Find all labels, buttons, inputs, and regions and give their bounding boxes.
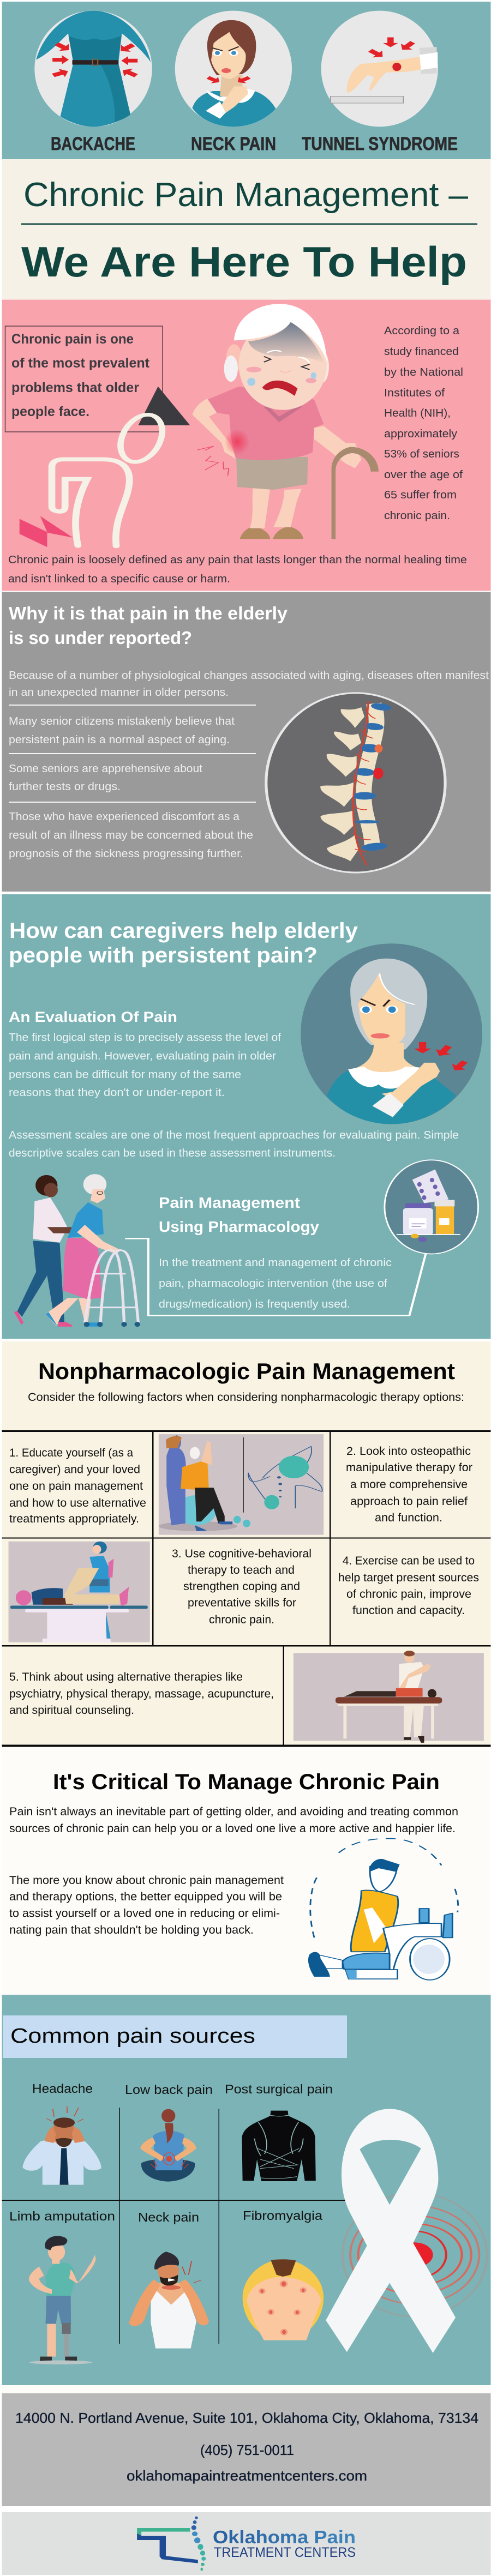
text: knowledge: The more you know about chronic pain management [9, 1874, 284, 1887]
text: NIH study: Institutes of [384, 387, 445, 399]
text: definition: and isn't linked to a specific cause or harm. [8, 573, 230, 585]
heading band: Common pain sources [10, 2025, 255, 2048]
labels: Fibromyalgia [243, 2208, 322, 2223]
text: evaluation: pain and anguish. However, evaluating pain in older [9, 1050, 276, 1062]
text: NIH study: chronic pain. [384, 509, 450, 522]
text: intro: sources of chronic pain can help you or a loved one live a more active and happier life. [9, 1822, 456, 1835]
icon: neck pain man [129, 2252, 209, 2349]
panel: contact details [2, 2393, 491, 2506]
text: tip 1: one on pain management [9, 1480, 143, 1492]
text: tip 5 [9, 1671, 274, 1717]
text: reasons list: persistent pain is a normal aspect of aging. [9, 733, 230, 746]
table grid [2, 1430, 491, 1747]
text: tip 2: manipulative therapy for [346, 1461, 472, 1474]
text: tip 3 [172, 1548, 312, 1626]
labels [9, 2081, 333, 2224]
text: pharmacology [159, 1256, 392, 1310]
heading [9, 603, 288, 648]
panel: logo band [2, 2512, 491, 2575]
website: oklahomapaintreatmentcenters.com [127, 2467, 367, 2484]
logo mark [137, 2517, 206, 2571]
text: NIH study: by the National [384, 366, 463, 378]
text: tip 2: 2. Look into osteopathic [346, 1445, 471, 1458]
icon: spine [266, 693, 445, 872]
text: knowledge [9, 1874, 284, 1936]
text: tip 4: 4. Exercise can be used to [343, 1555, 475, 1567]
text: evaluation: reasons that they don't or under-report it. [9, 1086, 225, 1099]
subheading: Consider the following factors when considering nonpharmacologic therapy options: [28, 1391, 464, 1404]
text: evaluation [9, 1031, 459, 1159]
text: reasons list: Some seniors are apprehensive about [9, 762, 202, 775]
text: tip 2: approach to pain relief [350, 1495, 468, 1508]
icon: low back pain [140, 2109, 196, 2182]
labels: Headache [32, 2081, 93, 2096]
icon: medication [385, 1160, 478, 1254]
icon: headache [22, 2106, 101, 2185]
phone: (405) 751-0011 [200, 2442, 294, 2458]
strip between panels [2, 2385, 491, 2393]
text: tip 2: and function. [375, 1512, 442, 1524]
icon: neck pain [175, 11, 292, 127]
grid lines [2, 2108, 345, 2344]
heading: Why it is that pain in the elderly [9, 603, 288, 623]
callout frame [125, 1238, 426, 1315]
title line 2: We Are Here To Help [21, 238, 467, 286]
labels: Limb amputation [9, 2209, 115, 2223]
text: reasons list [9, 669, 489, 860]
text: tip 4 [338, 1555, 479, 1617]
logo text: Oklahoma Pain [213, 2527, 356, 2547]
text: NIH study: Health (NIH), [384, 407, 451, 419]
icon: tunnel syndrome [321, 11, 438, 127]
icon: post surgical jacket [242, 2111, 316, 2181]
text: tip 3: chronic pain. [209, 1614, 274, 1626]
text: tip 3: therapy to teach and [188, 1564, 295, 1576]
text: intro [9, 1805, 458, 1835]
panel: pain types header [2, 2, 491, 159]
logo text: TREATMENT CENTERS [214, 2545, 356, 2560]
text: tip 3: 3. Use cognitive-behavioral [172, 1548, 312, 1560]
icon: elderly woman with cane [192, 304, 379, 539]
text: tip 1: treatments appropriately. [9, 1513, 139, 1525]
text: reasons list: in an unexpected manner in older persons. [9, 686, 229, 699]
subheading: pharmacology: Using Pharmacology [159, 1218, 319, 1235]
text: tip 4: function and capacity. [352, 1604, 465, 1617]
text: NIH study: 65 suffer from [384, 489, 457, 501]
heading: Nonpharmacologic Pain Management [38, 1358, 455, 1384]
text: reasons list: result of an illness may be concerned about the [9, 829, 253, 841]
text: intro: Pain isn't always an inevitable part of getting older, and avoiding and treating common [9, 1805, 458, 1818]
text: NIH study [384, 324, 463, 522]
callout box: problems that older [11, 380, 139, 395]
title line 1: Chronic Pain Management – [23, 176, 469, 214]
text: NIH study: According to a [384, 324, 460, 337]
text: tip 3: strengthen coping and [183, 1580, 300, 1593]
text: reasons list: Many senior citizens mistakenly believe that [9, 715, 235, 727]
text: tip 1 [9, 1447, 146, 1525]
labels: Low back pain [125, 2083, 213, 2097]
text: pharmacology: In the treatment and management of chronic [159, 1256, 392, 1269]
text: knowledge: and therapy options, the better equipped you will be [9, 1891, 282, 1903]
text: reasons list: further tests or drugs. [9, 780, 121, 793]
panel: common pain sources [2, 1995, 491, 2385]
subheading: pharmacology: Pain Management [159, 1194, 300, 1211]
illustration: therapy ball [159, 1434, 324, 1535]
callout box: Chronic pain is one [11, 332, 134, 347]
text: tip 1: and how to use alternative [9, 1497, 146, 1509]
icon: seated figure with back pain [20, 387, 190, 547]
icon: woman with shoulder pain [301, 943, 482, 1124]
text: tip 3: preventative skills for [188, 1597, 296, 1609]
text: NIH study: 53% of seniors [384, 448, 459, 460]
panel: chronic pain intro [2, 300, 491, 591]
text: definition: Chronic pain is loosely defined as any pain that lasts longer than the normal healing time [8, 553, 467, 566]
text: pharmacology: pain, pharmacologic intervention (the use of [159, 1277, 387, 1290]
panel: title [2, 159, 491, 299]
label: neck pain: NECK PAIN [191, 134, 276, 154]
text: tip 2 [346, 1445, 472, 1524]
label: backache: BACKACHE [51, 134, 135, 154]
callout box [5, 326, 163, 432]
text: reasons list: prognosis of the sickness progressing further. [9, 847, 243, 860]
text: reasons list: Because of a number of physiological changes associated with aging, diseases often manifest [9, 669, 489, 682]
text: tip 5: and spiritual counseling. [9, 1704, 134, 1717]
text: evaluation: persons can be difficult for many of the same [9, 1068, 241, 1081]
icon: awareness ribbon [326, 2109, 487, 2353]
icon: backache [34, 11, 152, 127]
text: pharmacology: drugs/medication) is frequently used. [159, 1298, 350, 1310]
text: evaluation: descriptive scales can be used in these assessment instruments. [9, 1147, 336, 1159]
text: tip 5: 5. Think about using alternative therapies like [9, 1671, 243, 1683]
panel: nonpharmacologic [2, 1341, 491, 1747]
text: tip 4: help target present sources [338, 1572, 479, 1584]
logo text [213, 2527, 356, 2560]
icon: caregiver with walker [14, 1174, 140, 1327]
text: reasons list: Those who have experienced discomfort as a [9, 810, 240, 823]
text: tip 2: a more comprehensive [350, 1478, 468, 1491]
text: evaluation: Assessment scales are one of the most frequent approaches for evaluating pain. Simple [9, 1129, 459, 1141]
text: definition [8, 553, 467, 585]
heading: people with persistent pain? [9, 943, 318, 967]
text: NIH study: study financed [384, 345, 459, 358]
heading: is so under reported? [9, 628, 192, 648]
text: knowledge: nating pain that shouldn't be holding you back. [9, 1924, 254, 1936]
labels: Post surgical pain [225, 2082, 333, 2096]
subheading: pharmacology [159, 1194, 319, 1235]
text: evaluation: The first logical step is to precisely assess the level of [9, 1031, 281, 1044]
labels: Neck pain [138, 2210, 199, 2224]
address: 14000 N. Portland Avenue, Suite 101, Oklahoma City, Oklahoma, 73134 [15, 2410, 478, 2426]
illustration: therapist with patient [308, 1839, 458, 1980]
icon: fibromyalgia [243, 2259, 324, 2340]
callout box: of the most prevalent [11, 356, 150, 371]
illustration: leg therapy [9, 1542, 150, 1642]
panel: caregivers [2, 894, 491, 1339]
panel: why under reported [2, 592, 491, 892]
heading: How can caregivers help elderly [9, 919, 358, 943]
icon: limb amputation [29, 2236, 96, 2364]
label: tunnel syndrome: TUNNEL SYNDROME [302, 134, 458, 154]
text: tip 5: psychiatry, physical therapy, massage, acupuncture, [9, 1688, 274, 1700]
text: tip 4: of chronic pain, improve [346, 1588, 471, 1600]
subheading: evaluation: An Evaluation Of Pain [9, 1009, 177, 1025]
callout box: people face. [11, 404, 89, 419]
text: knowledge: to assist yourself or a loved one in reducing or elimi- [9, 1907, 280, 1919]
text: tip 1: 1. Educate yourself (as a [9, 1447, 133, 1459]
text: NIH study: over the age of [384, 468, 463, 481]
panel: critical to manage [2, 1747, 491, 1995]
illustration: massage table [294, 1651, 484, 1743]
heading [9, 919, 358, 967]
text: NIH study: approximately [384, 428, 458, 440]
heading band [3, 2015, 347, 2058]
heading: It's Critical To Manage Chronic Pain [53, 1770, 440, 1794]
text: tip 1: caregiver) and your loved [9, 1464, 140, 1476]
